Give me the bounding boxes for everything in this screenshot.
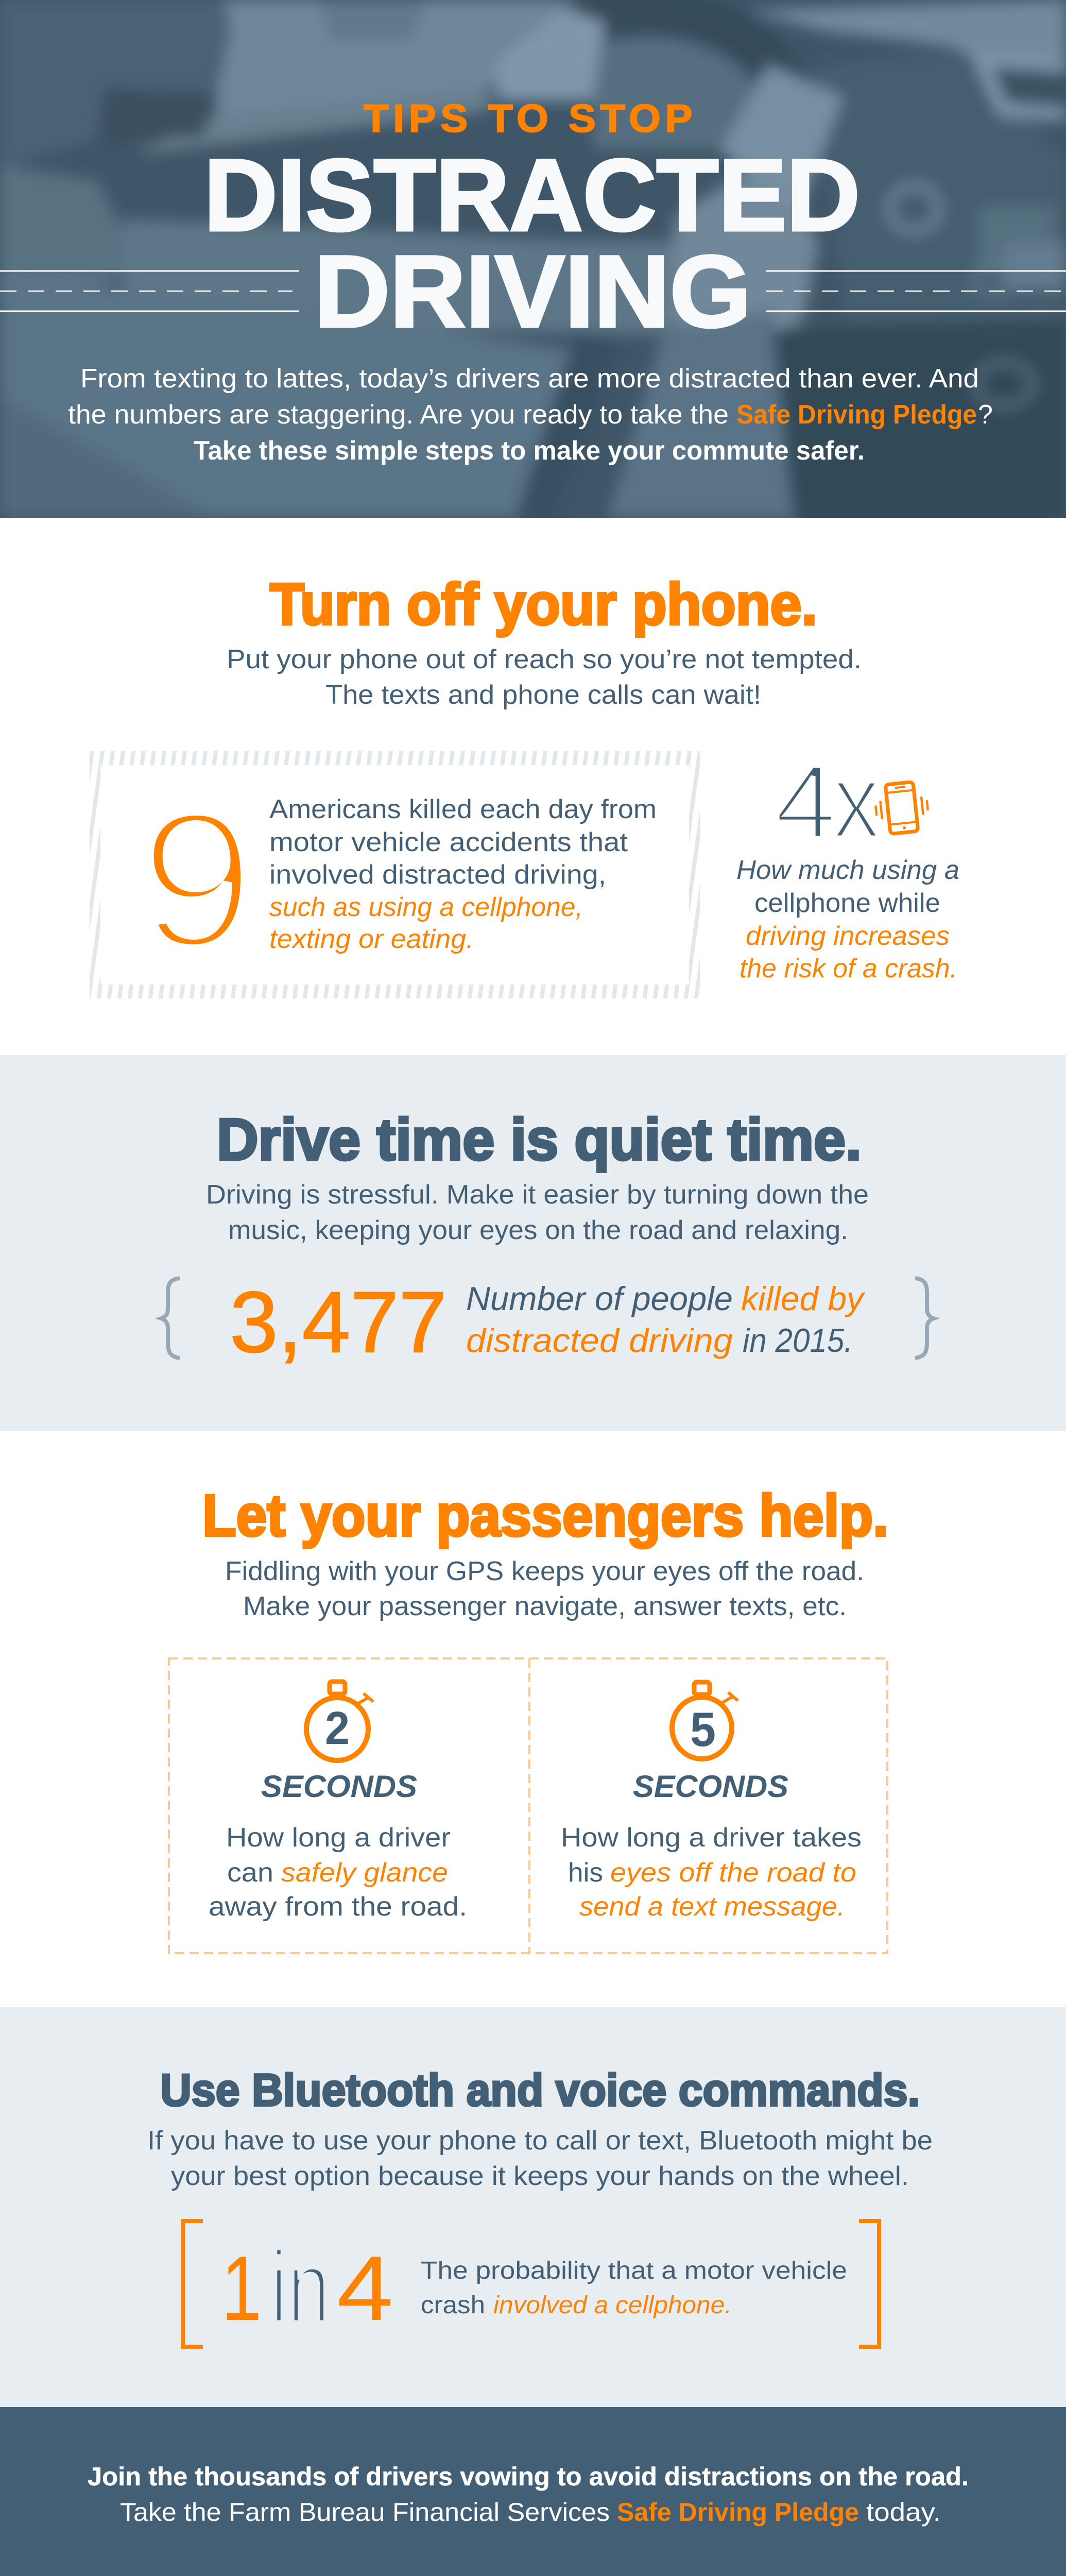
panel: call to action band: Take the Farm Bureau Financial Services xyxy=(120,2498,610,2527)
hero intro text: the numbers are staggering. Are you ready to take the xyxy=(68,400,729,430)
icon: stopwatch 2: 2 xyxy=(325,1703,350,1754)
description: How long a driver xyxy=(226,1823,451,1853)
hero intro text: From texting to lattes, today’s drivers are more distracted than ever. And xyxy=(80,364,979,394)
stat description: in 2015. xyxy=(743,1321,853,1359)
stat description: involved distracted driving, xyxy=(269,860,606,890)
4x number: x xyxy=(832,741,881,861)
stat description: texting or eating. xyxy=(269,924,474,954)
stat description: involved a cellphone. xyxy=(493,2292,732,2319)
panel: let your passengers help xyxy=(0,1431,1066,2007)
description: send a text message. xyxy=(579,1892,845,1922)
label: SECONDS xyxy=(633,1769,788,1804)
title line 2: DRIVING xyxy=(314,234,751,348)
stat description xyxy=(466,1280,866,1359)
heading: Drive time is quiet time. xyxy=(217,1107,862,1173)
description: cellphone while xyxy=(754,888,940,918)
icon: stopwatch 5: 5 xyxy=(690,1702,716,1756)
subheading: Make your passenger navigate, answer texts, etc. xyxy=(243,1591,847,1621)
panel: bluetooth and voice commands xyxy=(0,2007,1066,2407)
stat description: such as using a cellphone, xyxy=(269,892,583,922)
subheading xyxy=(225,1556,864,1621)
stat description xyxy=(421,2257,847,2319)
stat description: Number of people xyxy=(466,1280,733,1317)
subheading: Fiddling with your GPS keeps your eyes off the road. xyxy=(225,1556,864,1586)
subheading: Put your phone out of reach so you’re not tempted. xyxy=(227,645,862,674)
big number 3,477: 3,477 xyxy=(230,1274,447,1370)
stat description: crash xyxy=(421,2292,485,2319)
big number 1 in 4: 1 xyxy=(221,2237,262,2340)
icon: vibrating phone xyxy=(873,781,930,835)
road lines right xyxy=(766,271,1066,311)
stat description: distracted driving xyxy=(466,1321,733,1359)
stat description: killed by xyxy=(741,1280,866,1317)
panel: call to action band xyxy=(0,2407,1066,2576)
icon: stopwatch 5 xyxy=(672,1682,738,1759)
description xyxy=(736,855,959,984)
subheading: The texts and phone calls can wait! xyxy=(325,680,761,710)
panel: drive time is quiet time xyxy=(0,1055,1066,1431)
dashed frame xyxy=(169,1658,887,1953)
description: driving increases xyxy=(746,921,950,951)
right brace xyxy=(915,1278,934,1358)
subheading: music, keeping your eyes on the road and relaxing. xyxy=(228,1215,848,1245)
subheading: If you have to use your phone to call or text, Bluetooth might be xyxy=(147,2126,933,2156)
big number 1 in 4: in xyxy=(270,2230,330,2345)
right bracket xyxy=(859,2221,879,2347)
stat description: motor vehicle accidents that xyxy=(269,827,628,857)
label: SECONDS xyxy=(261,1769,417,1804)
heading: Use Bluetooth and voice commands. xyxy=(160,2064,920,2115)
description: How long a driver takes xyxy=(561,1823,862,1853)
stat description: The probability that a motor vehicle xyxy=(421,2257,847,2284)
4x stat xyxy=(736,741,959,984)
hero intro text xyxy=(68,364,993,466)
subheading xyxy=(227,645,862,710)
subheading: Driving is stressful. Make it easier by turning down the xyxy=(206,1180,869,1210)
heading: Turn off your phone. xyxy=(270,572,817,637)
hero intro text: Take these simple steps to make your commute safer. xyxy=(194,436,865,466)
panel: call to action band: Join the thousands of drivers vowing to avoid distractions on the road. xyxy=(88,2462,969,2491)
stat description: Americans killed each day from xyxy=(269,794,657,824)
left brace xyxy=(161,1278,180,1358)
panel: hero header xyxy=(0,0,1066,518)
hero intro text: ? xyxy=(978,400,993,430)
big number 9: 9 xyxy=(139,771,255,989)
title line 1: DISTRACTED xyxy=(204,138,860,252)
subheading xyxy=(147,2126,933,2191)
stat: 5 seconds xyxy=(561,1682,862,1922)
panel: call to action band: Safe Driving Pledge xyxy=(617,2498,859,2527)
icon: stopwatch 2 xyxy=(306,1682,373,1760)
road lines left xyxy=(0,271,299,311)
description: How much using a xyxy=(736,855,959,885)
hero background photo: driver holding phone xyxy=(0,0,1066,518)
description: the risk of a crash. xyxy=(740,954,957,984)
4x number xyxy=(775,741,881,861)
description: can xyxy=(227,1858,273,1888)
panel: call to action band: today. xyxy=(866,2498,941,2527)
description: safely glance xyxy=(281,1858,448,1888)
description xyxy=(561,1823,862,1922)
hatched stat box xyxy=(90,751,700,998)
hero intro text: Safe Driving Pledge xyxy=(736,400,977,430)
description: away from the road. xyxy=(209,1892,467,1922)
subheading: your best option because it keeps your hands on the wheel. xyxy=(171,2161,909,2191)
panel: turn off your phone xyxy=(0,518,1066,1055)
description: his xyxy=(568,1858,603,1888)
title kicker: TIPS TO STOP xyxy=(364,97,697,141)
4x number: 4 xyxy=(775,743,836,861)
subheading xyxy=(206,1180,869,1245)
description: eyes off the road to xyxy=(610,1858,856,1888)
stat: 2 seconds xyxy=(209,1682,467,1922)
heading: Let your passengers help. xyxy=(202,1483,888,1549)
left bracket xyxy=(183,2221,203,2347)
big number 1 in 4: 4 xyxy=(337,2237,393,2340)
stat description xyxy=(269,794,657,954)
description xyxy=(209,1823,467,1922)
big number 1 in 4 xyxy=(221,2230,393,2345)
